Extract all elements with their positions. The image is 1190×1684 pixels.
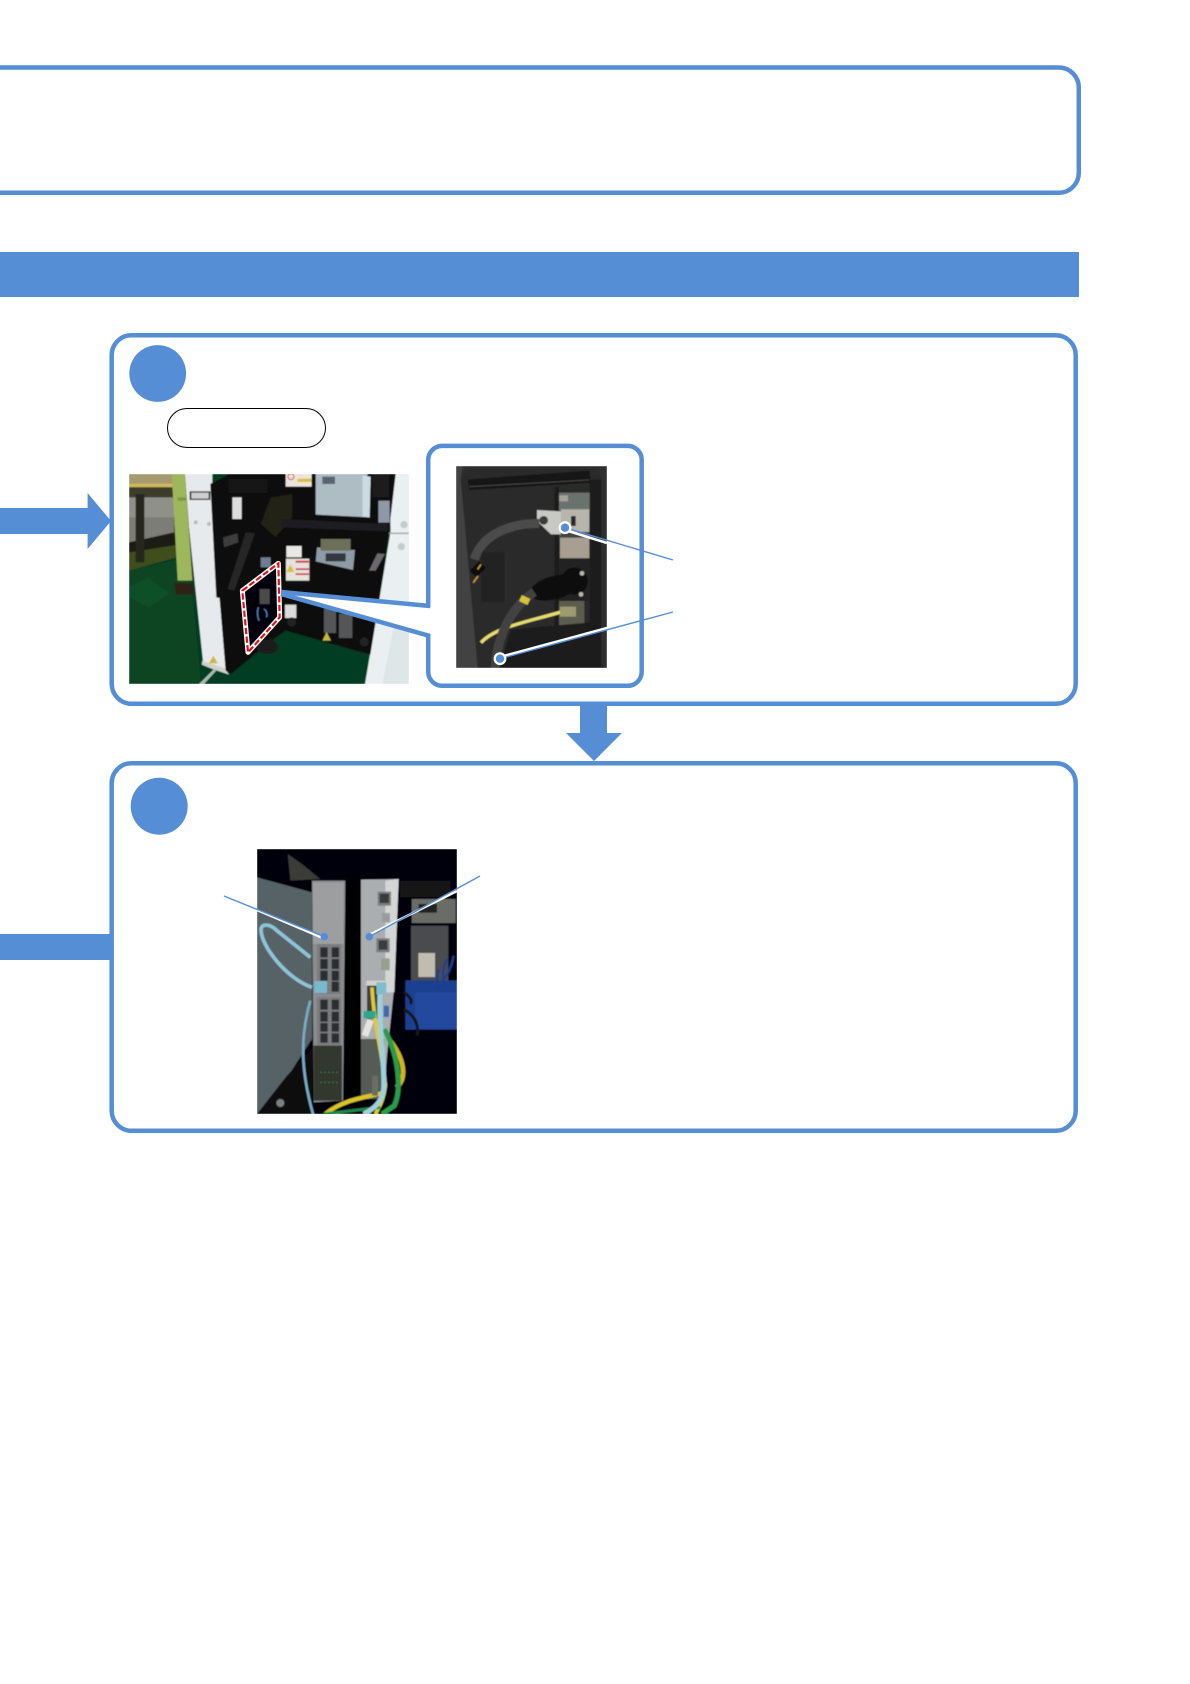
connector bar into step 2 — [0, 934, 112, 960]
panel: step 1 — [112, 335, 1076, 704]
heading bar — [0, 252, 1079, 297]
step 1 number badge — [129, 345, 186, 402]
leader line: switch module — [224, 896, 328, 940]
arrow: step 1 to step 2 — [566, 703, 622, 761]
leader line: lower cable — [494, 612, 673, 665]
step 1 pill label — [168, 408, 326, 448]
panel: top note box — [0, 68, 1079, 193]
photo: connectors inside door — [456, 466, 607, 668]
callout: inset frame with zoom wedge — [281, 446, 642, 686]
photo: network switch modules — [257, 849, 457, 1114]
highlight: dashed red area marker — [242, 563, 280, 652]
step 2 number badge — [131, 778, 188, 835]
photo: machine with open door — [129, 474, 409, 684]
panel: step 2 — [112, 763, 1076, 1131]
leader line: upper connector — [559, 521, 673, 560]
arrow: left arrow into step 1 — [0, 493, 111, 549]
leader line: controller module — [366, 876, 480, 940]
